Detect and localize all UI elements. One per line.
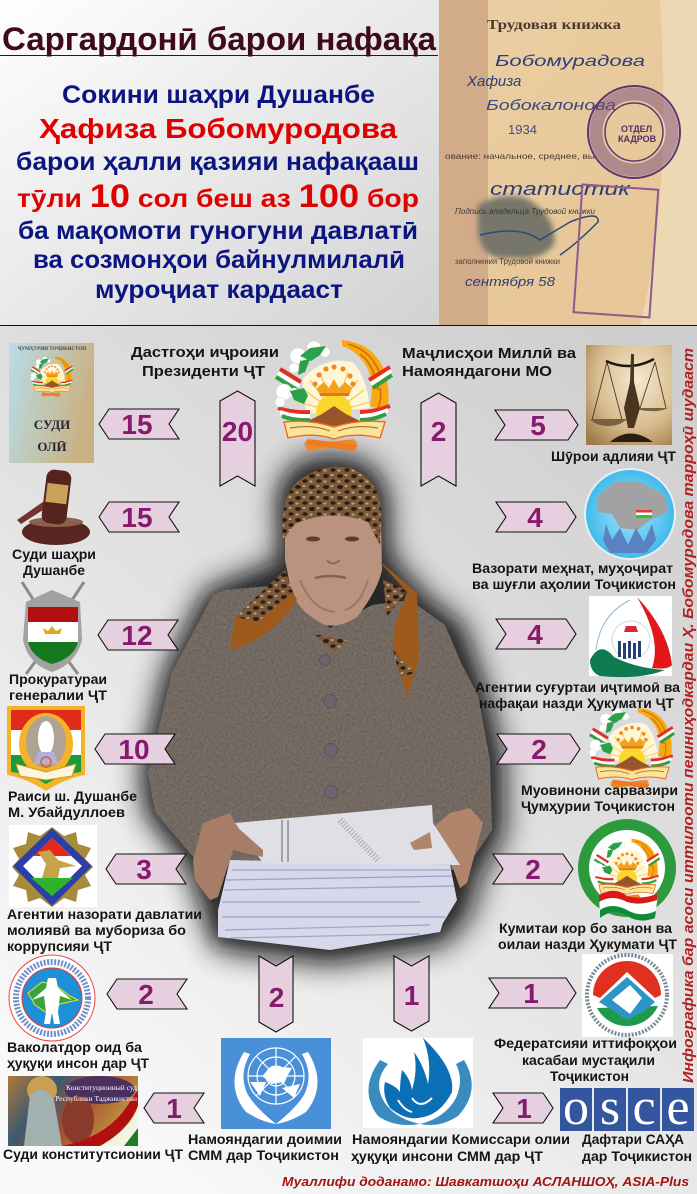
arrow: 1 САҲА: 1	[516, 1093, 532, 1124]
label: Дафтари САҲА	[582, 1131, 692, 1164]
page background	[0, 326, 697, 1194]
photo: labour record book: заполнения Трудовой книжки	[455, 257, 560, 266]
intro text	[16, 81, 419, 304]
arrow: 1 Суди конститутсионӣ: 1	[166, 1093, 182, 1124]
label: Кумитаи кор: Кумитаи кор бо занон ва	[499, 920, 672, 936]
photo: labour record book: 1934	[508, 122, 537, 137]
photo: labour record book: статистик	[490, 179, 632, 199]
label: Дафтари САҲА: дар Тоҷикистон	[582, 1148, 692, 1164]
arrow: 1 Комиссари олӣ	[394, 956, 429, 1031]
icon: prosecutor shield	[22, 582, 84, 674]
arrow: 2 Кумитаи кор: 2	[525, 854, 541, 885]
arrow: 1 Суди конститутсионӣ	[144, 1093, 204, 1124]
label: Маҷлисҳои Миллӣ: Намояндагони МО	[402, 363, 552, 380]
label: Суди шаҳри: Душанбе	[23, 562, 85, 578]
label: Раиси шаҳр: М. Убайдуллоев	[8, 804, 125, 820]
label: Агентии назорат: Агентии назорати давлатии	[7, 906, 202, 922]
photo: labour record book: сентября 58	[465, 274, 556, 289]
arrow: 15 Суди шаҳри: 15	[121, 502, 153, 533]
cardigan	[148, 585, 492, 870]
intro text: барои ҳалли қазияи нафақааш	[16, 148, 419, 176]
arrow: 2 Маҷлисҳои: 2	[431, 416, 446, 447]
label: Суди шаҳри	[12, 546, 96, 578]
icon: women and family committee seal	[578, 819, 676, 921]
intro text: ба мақомоти гуногуни давлатӣ	[18, 217, 418, 245]
label: Намояндагии Комиссари: ҳуқуқи инсони СММ дар ҶТ	[351, 1148, 543, 1164]
label: Вазорати меҳнат: ва шуғли аҳолии Тоҷикистон	[472, 576, 676, 592]
label: Суди конститутсионӣ: Суди конститутсионии ҶТ	[3, 1146, 183, 1162]
neckline	[313, 634, 347, 652]
icon: constitutional court picture	[8, 1076, 138, 1146]
label: Вазорати меҳнат	[472, 560, 676, 592]
photo: labour record book: Трудовая книжка	[487, 18, 621, 33]
icon: Supreme Court book: ҶУМҲУРИИ ТОҶИКИСТОН	[18, 347, 86, 352]
photo: labour record book: ование: начальное, среднее, вы	[445, 152, 595, 161]
label: Муовинони сарвазир	[521, 782, 678, 814]
icon: labour ministry globe	[585, 469, 675, 559]
label: Прокуратура	[9, 671, 107, 703]
hands	[193, 813, 263, 900]
label: Намояндагии доимии	[188, 1131, 342, 1163]
arrow: 2 Муовинони сарвазир: 2	[531, 734, 547, 765]
icon: state emblem	[275, 340, 392, 451]
arrow: 10 Раиси шаҳр: 10	[118, 734, 150, 765]
arrow: 20 Президенти	[220, 391, 255, 486]
label: Федератсия	[494, 1035, 677, 1084]
arrow: 3 Агентии назорат: 3	[136, 854, 152, 885]
label: Агентии суғурта: Агентии суғуртаи иҷтимоӣ ва	[475, 679, 680, 695]
icon: Supreme Court book	[9, 343, 94, 463]
icon: gavel	[17, 469, 90, 545]
label: Маҷлисҳои Миллӣ: Маҷлисҳои Миллӣ ва	[402, 345, 577, 362]
icon: Supreme Court book: СУДИ	[34, 417, 70, 432]
label: Федератсия: касабаи мустақили	[522, 1052, 655, 1068]
label: Дастгоҳи иҷроия: Президенти ҶТ	[142, 363, 265, 380]
arrow: 2 Муовинони сарвазир	[497, 734, 580, 765]
title underline	[0, 55, 438, 56]
vertical credit: Инфографика бар асоси иттилооти пешниҳодкардаи Ҳ. Бобомуродова тарроҳӣ шудааст	[680, 348, 697, 1083]
scarf tails	[235, 570, 293, 622]
intro text: ва созмонҳои байнулмилалӣ	[33, 246, 405, 274]
paper stack	[218, 860, 457, 950]
icon: Dushanbe coat of arms	[7, 706, 85, 791]
photo: labour record book: Бобомурадова	[495, 53, 645, 70]
photo: labour record book: КАДРОВ	[618, 134, 657, 144]
arrow: 12 Прокуратура: 12	[121, 620, 153, 651]
icon: social insurance agency logo	[589, 596, 672, 677]
icon: trade union federation seal	[582, 954, 673, 1037]
icon: scales of justice	[586, 345, 672, 445]
photo: labour record book: ОТДЕЛ	[621, 124, 652, 134]
shadow around figure	[140, 456, 505, 965]
arrow: 2 Кумитаи кор	[493, 854, 573, 885]
arrow: 2 СММ	[259, 956, 293, 1032]
arrow: 1 Федератсия: 1	[523, 978, 539, 1009]
label: Прокуратура: генералии ҶТ	[9, 687, 107, 703]
photo: labour record book: Подпись владельца Трудовой книжки	[455, 207, 596, 216]
label: Кумитаи кор	[498, 920, 677, 952]
arrow: 4 Агентии суғурта: 4	[527, 619, 543, 650]
photo: woman with documents	[140, 456, 505, 965]
icon: OSCE logo: c	[632, 1079, 656, 1136]
intro text: муроҷиат кардааст	[95, 276, 343, 304]
label: Дастгоҳи иҷроия: Дастгоҳи иҷроияи	[131, 344, 279, 361]
label: Намояндагии Комиссари: Намояндагии Комиссари олии	[352, 1131, 570, 1147]
label: Намояндагии доимии: Намояндагии доимии	[188, 1131, 342, 1147]
arrow: 1 САҲА	[493, 1093, 553, 1124]
arrow: 2 Ваколатдор: 2	[138, 979, 154, 1010]
icon: United Nations flag	[221, 1038, 331, 1129]
header bottom rule	[0, 325, 697, 326]
label: Агентии суғурта: нафақаи назди Ҳукумати ҶТ	[479, 695, 674, 711]
arrow: 4 Агентии суғурта	[496, 619, 576, 650]
icon: OSCE logo: o	[563, 1079, 589, 1136]
label: Ваколатдор: Ваколатдор оид ба	[7, 1039, 142, 1055]
intro text: Сокини шаҳри Душанбе	[62, 81, 375, 109]
label: Федератсия: Тоҷикистон	[550, 1068, 629, 1084]
arrow: 1 Федератсия	[489, 978, 576, 1009]
face	[285, 514, 382, 626]
label: Намояндагии Комиссари	[351, 1131, 570, 1164]
label: Кумитаи кор: оилаи назди Ҳукумати ҶТ	[498, 936, 677, 952]
label: Агентии суғурта	[475, 679, 680, 711]
label: Агентии назорат: молиявӣ ва мубориза бо	[7, 922, 186, 938]
headscarf	[282, 467, 381, 545]
icon: OSCE logo	[560, 1079, 694, 1136]
label: Федератсия: Федератсияи иттифоқҳои	[494, 1035, 677, 1051]
label: Ваколатдор: ҳуқуқи инсон дар ҶТ	[7, 1055, 149, 1071]
intro text: тӯли 10 сол беш аз 100 бор	[17, 178, 419, 214]
photo: labour record book: Хафиза	[466, 73, 521, 90]
arrow: 12 Прокуратура	[98, 620, 178, 651]
icon: Supreme Court book: ОЛӢ	[37, 439, 67, 454]
label: Муовинони сарвазир: Муовинони сарвазири	[521, 782, 678, 798]
footer author credit: Муаллифи доданамо: Шавкатшоҳи АСЛАНШОҲ, ASIA-Plus	[282, 1174, 689, 1189]
arrow: 15 Суди олӣ: 15	[121, 409, 153, 440]
label: Суди шаҳри: Суди шаҳри	[12, 546, 96, 562]
label: Вазорати меҳнат: Вазорати меҳнат, муҳоҷират	[472, 560, 673, 576]
arrow: 1 Комиссари олӣ: 1	[404, 980, 419, 1011]
label: Раиси шаҳр	[8, 788, 137, 820]
arrow: 2 Ваколатдор	[107, 979, 187, 1010]
icon: deputy prime minister emblem	[589, 708, 674, 788]
arrow: 4 Вазорат	[496, 502, 576, 533]
icon: OSCE logo: e	[666, 1079, 690, 1136]
icon: ombudsman seal	[9, 955, 95, 1041]
panel: header	[0, 0, 440, 325]
arrow: 4 Вазорат: 4	[527, 502, 543, 533]
label: Намояндагии доимии: СММ дар Тоҷикистон	[188, 1147, 339, 1163]
label: Раиси шаҳр: Раиси ш. Душанбе	[8, 788, 137, 804]
label: Дафтари САҲА: Дафтари САҲА	[582, 1131, 684, 1147]
label: Маҷлисҳои Миллӣ	[402, 345, 577, 380]
intro text: Ҳафиза Бобомуродова	[39, 113, 397, 144]
arrow: 2 СММ: 2	[269, 982, 284, 1013]
label: Агентии назорат: коррупсияи ҶТ	[7, 938, 112, 954]
label: Дастгоҳи иҷроия	[131, 344, 279, 380]
arrow: 10 Раиси шаҳр	[95, 734, 175, 765]
photo: labour record book: Бобокалонова	[486, 97, 616, 114]
arrow: 2 Маҷлисҳои	[421, 393, 456, 486]
icon: OSCE logo: s	[600, 1079, 620, 1136]
label: Ваколатдор	[7, 1039, 149, 1071]
arrow: 20 Президенти: 20	[222, 416, 253, 447]
arrow: 15 Суди олӣ	[99, 409, 179, 440]
arrow: 5 Шӯрои адлия: 5	[530, 410, 546, 441]
icon: OHCHR emblem	[363, 1038, 473, 1128]
arrow: 5 Шӯрои адлия	[495, 410, 578, 441]
label: Шӯрои адлия: Шӯрои адлияи ҶТ	[551, 448, 676, 464]
icon: constitutional court picture: Республики Таджикистан	[55, 1094, 137, 1103]
icon: constitutional court picture: Конституционный суд	[66, 1083, 137, 1092]
title: Саргардонӣ барои нафақа	[2, 21, 436, 57]
label: Муовинони сарвазир: Ҷумҳурии Тоҷикистон	[521, 798, 675, 814]
arrow: 3 Агентии назорат	[106, 854, 186, 885]
icon: anti-corruption agency badge	[9, 825, 97, 907]
buttons	[320, 654, 338, 798]
arrow: 15 Суди шаҳри	[99, 502, 179, 533]
photo: labour record book	[439, 0, 697, 325]
label: Прокуратура: Прокуратураи	[9, 671, 107, 687]
label: Агентии назорат	[7, 906, 202, 954]
